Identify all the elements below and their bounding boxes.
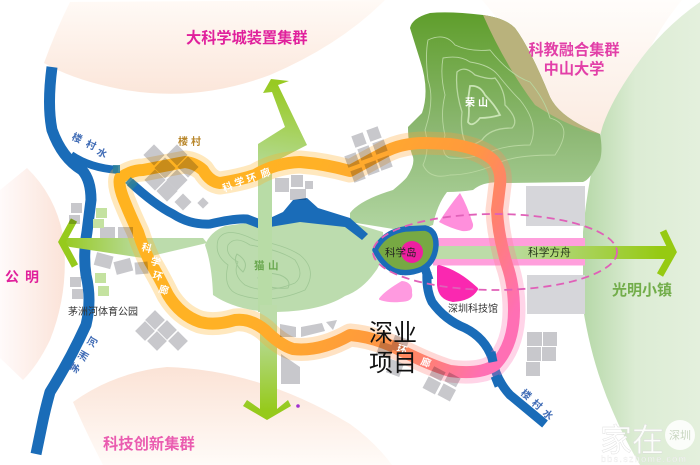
watermark: bbs.szhome.com: [601, 454, 687, 464]
heading: science education cluster and university: 中山大学: [544, 60, 604, 78]
panel: Maoshan green area: [205, 219, 383, 312]
river hump near Maoshan: [270, 198, 368, 240]
overlap of the mountain and university zone: [483, 15, 600, 134]
science corridor loop: [120, 143, 514, 372]
heading: Guangming town: 光明小镇: [612, 281, 672, 299]
heading: science education cluster and university: [528, 41, 620, 78]
label: science island: 科学岛: [385, 246, 416, 259]
pink building: north: [439, 193, 473, 231]
arrow: north to science facilities: [258, 79, 307, 312]
callout: Shenye project: [369, 320, 417, 377]
contours: Rongshan: [423, 37, 564, 176]
purple dot: [296, 404, 300, 408]
arrow: south to innovation cluster: [243, 305, 291, 420]
panel: Gongming zone: [0, 168, 65, 380]
arrow: west to Gongming: [62, 220, 207, 266]
label: science corridor south: 环廊: [395, 343, 433, 370]
label: Loucun water lower: 楼村水: [518, 386, 556, 423]
panel: science facilities cluster zone: [44, 0, 385, 94]
river crossings over the corridor: [113, 169, 135, 187]
heading: Gongming: 公明: [5, 269, 45, 285]
heading: technology innovation cluster: 科技创新集群: [103, 435, 195, 453]
panel: Rongshan mountain: [350, 12, 602, 232]
science ark pink bands: [433, 238, 585, 266]
watermark: [600, 420, 695, 464]
gray plot: north of science ark: [526, 186, 585, 226]
contours: Maoshan: [217, 232, 310, 299]
label: science corridor north: 科学环廊: [221, 165, 272, 195]
label: Rongshan: 荣山: [465, 96, 488, 109]
heading: science facilities cluster: 大科学城装置集群: [186, 29, 308, 47]
pink building: Shenzhen science museum: [439, 267, 476, 300]
watermark: 家在: [600, 422, 664, 458]
river: Loucun water and Maozhou river: [36, 67, 545, 454]
label: Maoshan: 猫山: [254, 259, 278, 272]
green building blocks: [93, 208, 109, 296]
panel: Guangming town zone: [583, 2, 700, 465]
gray building blocks: [69, 126, 557, 401]
panel: Sun Yat-sen University cluster zone: [482, 0, 682, 134]
label: Loucun: 楼村: [178, 135, 204, 148]
callout: Shenye project: 项目: [369, 350, 417, 377]
label: Maozhou river sports park: 茅洲河体育公园: [68, 305, 138, 318]
green axis arrow: east to Guangming: [433, 231, 673, 275]
watermark: 深圳: [669, 429, 691, 442]
science island: [375, 228, 436, 273]
label: science corridor west: 科学环廊: [140, 240, 170, 297]
label: science ark: 科学方舟: [528, 246, 571, 259]
label: Maozhou river: 茅洲河: [68, 335, 101, 376]
callout: Shenye project: 深业: [369, 320, 417, 347]
gray plot: south of science ark: [527, 275, 585, 314]
panel: technology innovation cluster zone: [73, 367, 392, 465]
dashed ellipse: science ark zone: [373, 214, 617, 290]
label: Loucun water upper: 楼村水: [70, 130, 109, 161]
pink building: southwest: [380, 282, 411, 301]
heading: science education cluster and university: 科教融合集群: [528, 41, 620, 59]
label: Shenzhen science museum: 深圳科技馆: [448, 302, 498, 315]
